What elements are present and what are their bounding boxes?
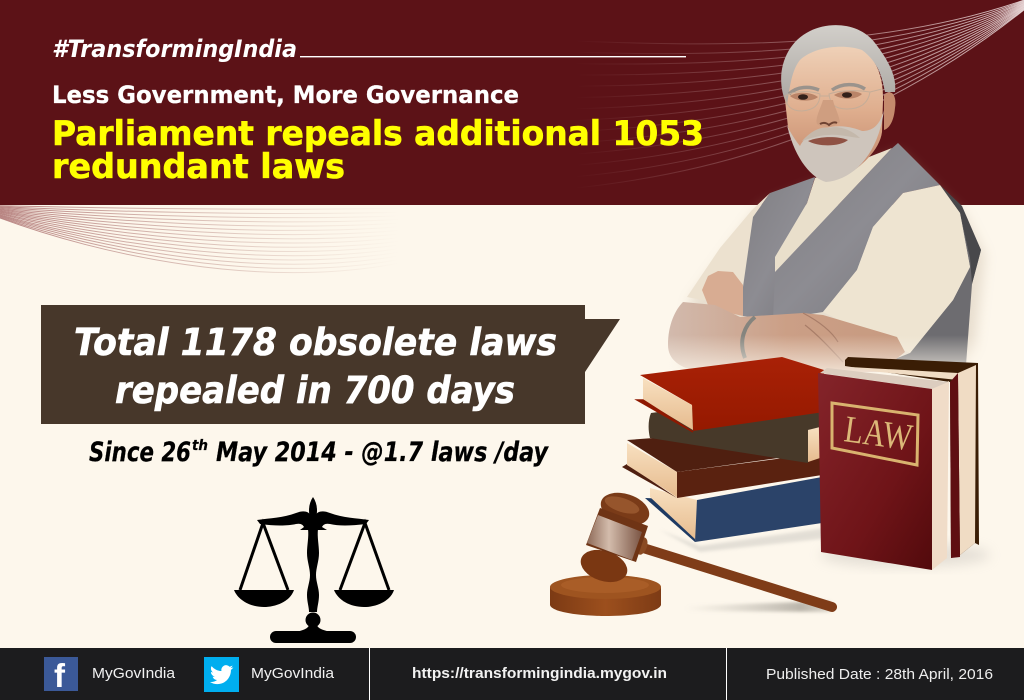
blue book <box>645 477 822 542</box>
head top highlight <box>603 493 641 517</box>
law label <box>832 403 918 465</box>
front book pages <box>932 381 949 570</box>
icon: scales of justice <box>234 497 394 643</box>
gavel <box>550 487 832 616</box>
since date line: May 2014 - @1.7 laws /day <box>216 437 549 468</box>
law books <box>818 357 990 570</box>
red book <box>637 357 824 432</box>
back book <box>845 357 979 558</box>
published date: Published Date : 28th April, 2016 <box>766 666 993 683</box>
moustache <box>802 127 860 141</box>
law label text: LAW <box>842 408 915 459</box>
headline: redundant laws <box>52 147 345 187</box>
portrait of the prime minister <box>660 25 985 375</box>
hair <box>781 25 895 105</box>
hashtag rule <box>300 56 686 57</box>
stack of books <box>622 357 830 552</box>
bracelet <box>742 317 755 358</box>
handle <box>640 547 832 607</box>
vest right panel <box>773 143 940 320</box>
face <box>785 42 883 178</box>
forearm and hands <box>668 302 905 372</box>
tagline: Less Government, More Governance <box>52 81 519 109</box>
headline: Parliament repeals additional 1053 <box>52 114 704 154</box>
icon: twitter <box>204 657 239 692</box>
footer bar <box>0 648 1024 700</box>
hand crease <box>803 313 843 362</box>
website url: https://transformingindia.mygov.in <box>412 665 667 682</box>
decorative wave lines in header <box>575 0 1024 188</box>
since date line <box>89 437 549 468</box>
beard <box>787 110 884 182</box>
head body <box>586 508 648 562</box>
banner line 1: Total 1178 obsolete laws <box>74 321 557 364</box>
left sleeve <box>687 193 770 300</box>
banner line 2: repealed in 700 days <box>115 369 515 412</box>
nostrils <box>820 122 837 125</box>
right sleeve <box>823 185 970 353</box>
handle collar <box>634 536 650 556</box>
icon: facebook: f <box>54 657 66 694</box>
hashtag: #TransformingIndia <box>52 35 297 63</box>
glasses <box>785 89 882 111</box>
dark book <box>649 390 822 463</box>
twitter handle: MyGovIndia <box>251 665 335 682</box>
vest dark armhole <box>940 185 981 284</box>
front book cover <box>818 373 932 570</box>
vest lower and right edge <box>880 185 981 365</box>
vest left panel <box>743 177 815 320</box>
eyebrows <box>789 85 865 94</box>
nose <box>817 100 840 127</box>
lips <box>808 137 848 145</box>
banner <box>41 305 620 424</box>
front book top <box>820 368 948 389</box>
fade overlay at the bottom of the portrait <box>660 335 980 375</box>
eye <box>798 94 808 100</box>
decorative wave lines below header <box>0 206 400 273</box>
facebook handle: MyGovIndia <box>92 665 176 682</box>
second eye <box>842 92 852 98</box>
headline <box>52 114 704 187</box>
eye sockets <box>790 91 862 101</box>
since date line: Since 26 <box>89 437 191 468</box>
head lower cap <box>577 544 631 588</box>
kurta collar and v-neck <box>775 148 892 272</box>
since date line: th <box>192 438 208 454</box>
fingers <box>702 271 743 316</box>
footer dividers <box>370 648 726 700</box>
header band <box>0 0 1024 205</box>
ear <box>884 92 895 130</box>
head silver band <box>587 515 642 560</box>
brown book <box>622 436 822 498</box>
icon: facebook <box>44 657 78 694</box>
sound block <box>550 575 661 616</box>
head upper cap <box>597 487 653 531</box>
